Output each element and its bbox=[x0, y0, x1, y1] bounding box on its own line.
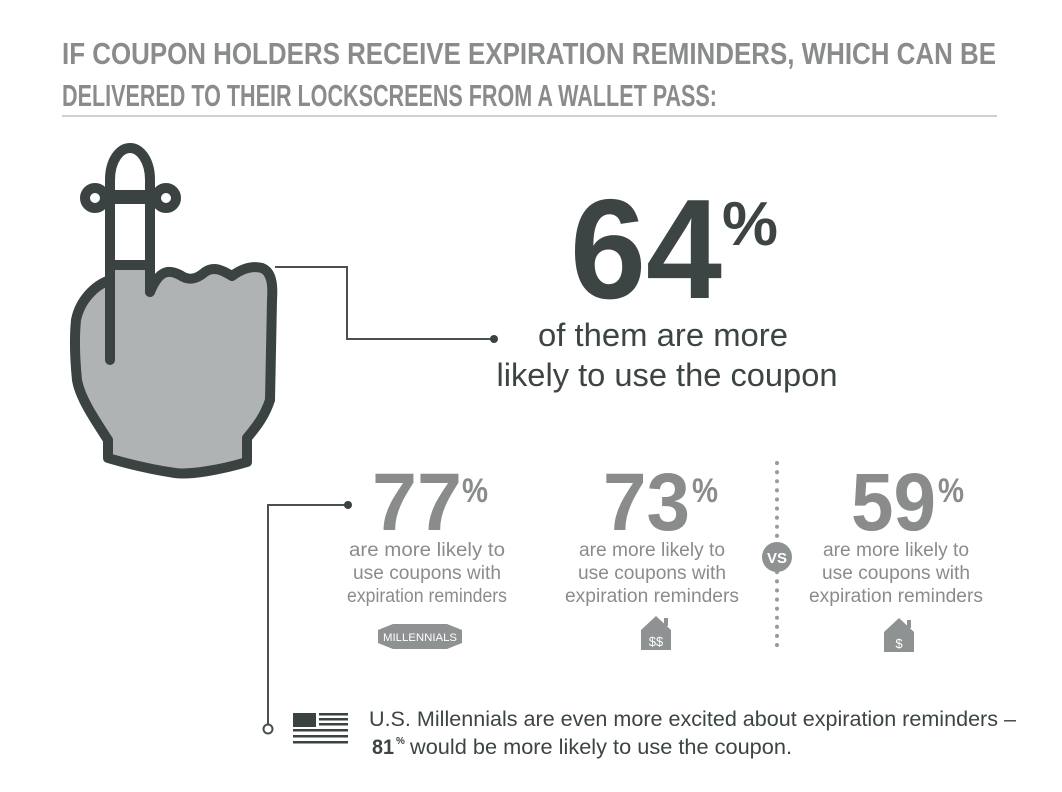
title: DELIVERED TO THEIR LOCKSCREENS FROM A WALLET PASS: bbox=[62, 78, 717, 113]
stat: 73%: are more likely to bbox=[579, 540, 725, 561]
stat: 77% millennials: are more likely to bbox=[349, 540, 505, 561]
stat: 77% millennials bbox=[347, 457, 507, 649]
divider with vs bbox=[762, 463, 792, 652]
connector to bottom note bbox=[264, 501, 352, 734]
stat: 77% millennials: use coupons with bbox=[353, 563, 501, 584]
stat: 77% millennials: 77 bbox=[372, 457, 462, 548]
stat: 73%: expiration reminders bbox=[565, 586, 739, 607]
stat: 64%: of them are more bbox=[538, 317, 788, 353]
stat: 59% bbox=[809, 457, 983, 652]
title bbox=[62, 36, 996, 113]
stat: 59%: 59 bbox=[851, 457, 936, 548]
stat: 73%: 73 bbox=[603, 457, 690, 548]
badge: millennials bbox=[378, 624, 462, 649]
note: US millennials 81% bbox=[369, 708, 1016, 759]
stat: 73% bbox=[565, 457, 739, 650]
stat: 59%: expiration reminders bbox=[809, 586, 983, 607]
note: US millennials 81%: % bbox=[396, 736, 405, 747]
stat: 64%: likely to use the coupon bbox=[496, 357, 838, 393]
icon: house $$ bbox=[641, 616, 671, 650]
stat: 73%: use coupons with bbox=[578, 563, 726, 584]
icon: house $$: $$ bbox=[649, 634, 664, 649]
icon: house $ bbox=[884, 618, 914, 652]
note: US millennials 81%: 81 bbox=[372, 736, 394, 759]
stat: 77% millennials: expiration reminders bbox=[347, 586, 507, 607]
stat: 73%: % bbox=[692, 472, 718, 510]
note: US millennials 81%: U.S. Millennials are even more excited about expiration reminders – bbox=[369, 708, 1016, 731]
stat: 59%: use coupons with bbox=[822, 563, 970, 584]
icon: hand with string on finger bbox=[75, 148, 272, 473]
icon: US flag bbox=[293, 713, 348, 744]
stat: 64%: 64 bbox=[570, 170, 722, 329]
stat: 59%: are more likely to bbox=[823, 540, 969, 561]
icon: house $: $ bbox=[895, 636, 903, 651]
badge: millennials: MILLENNIALS bbox=[383, 632, 457, 644]
stat: 77% millennials: % bbox=[462, 472, 488, 510]
stat: 59%: % bbox=[938, 472, 964, 510]
stat: 64%: % bbox=[722, 190, 778, 259]
stat: 64% bbox=[496, 170, 838, 393]
divider with vs: VS bbox=[767, 550, 787, 567]
note: US millennials 81%: would be more likely to use the coupon. bbox=[409, 736, 792, 759]
connector arrow to 64% bbox=[275, 267, 498, 343]
